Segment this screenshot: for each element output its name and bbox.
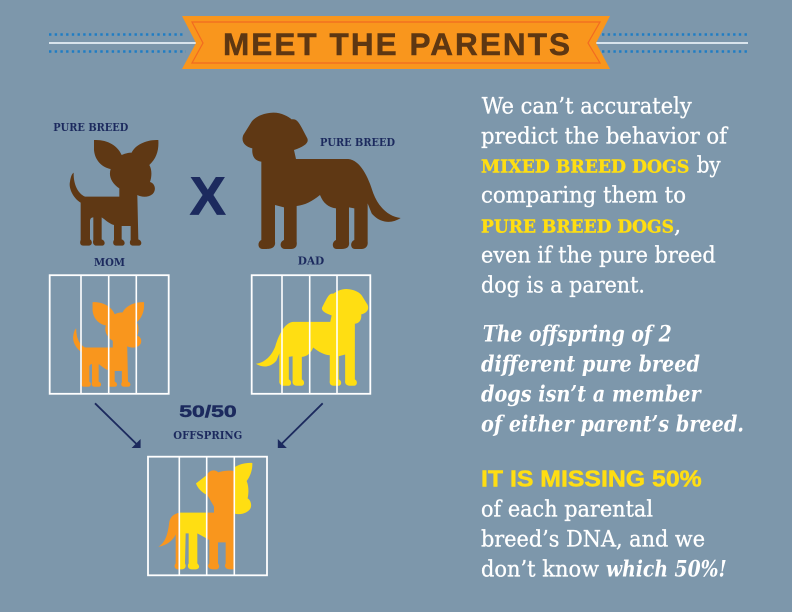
cage: offspring mixed dog — [148, 456, 267, 576]
text block: offspring statement: The offspring of 2 — [483, 322, 672, 348]
icon: yellow large dog — [256, 289, 368, 386]
text block: intro — [481, 93, 729, 298]
text block: missing dna: of each parental — [481, 497, 653, 523]
text block: missing dna: breed’s DNA, and we — [481, 527, 705, 553]
title: MEET THE PARENTS — [223, 26, 570, 62]
text block: missing dna — [481, 466, 727, 583]
label: 50/50: 50/50 — [179, 402, 237, 421]
text block: intro: MIXED BREED DOGS — [481, 158, 689, 178]
text block: offspring statement: different pure breed — [481, 352, 700, 378]
text block: offspring statement: dogs isn’t a member — [481, 382, 703, 408]
text block: intro: , — [674, 212, 681, 238]
arrow: dad to offspring — [278, 403, 323, 448]
text block: intro: predict the behavior of — [481, 123, 729, 149]
text block: offspring statement — [481, 322, 744, 438]
label: dad: DAD — [298, 254, 324, 268]
text block: missing dna: which 50%! — [606, 557, 727, 583]
icon: orange chihuahua — [73, 302, 144, 387]
mom parent group — [53, 120, 158, 269]
label: pure breed mom: PURE BREED — [53, 120, 128, 134]
label: pure breed dad: PURE BREED — [320, 135, 395, 149]
text block: intro: comparing them to — [481, 182, 686, 208]
cage: dad genes — [252, 275, 370, 394]
text block: intro: dog is a parent. — [481, 272, 645, 298]
dad parent group — [243, 113, 401, 268]
icon: brown large dog dad — [243, 113, 401, 249]
icon: offspring striped dog — [158, 463, 252, 569]
text block: intro: by — [697, 153, 721, 179]
multiply sign: X — [190, 167, 226, 227]
text block: intro: We can’t accurately — [482, 93, 692, 119]
banner ribbon — [182, 16, 610, 69]
label: mom: MOM — [94, 255, 125, 269]
text block: intro: PURE BREED DOGS — [481, 217, 674, 237]
text block: missing dna: don’t know — [481, 557, 599, 583]
label: offspring: OFFSPRING — [173, 428, 242, 442]
text block: offspring statement: of either parent’s breed. — [481, 412, 744, 438]
icon: brown chihuahua mom — [70, 140, 158, 246]
arrow: mom to offspring — [95, 403, 141, 448]
title banner — [182, 16, 610, 69]
text block: missing dna: IT IS MISSING 50% — [481, 466, 702, 492]
cage: mom genes — [50, 275, 169, 394]
text block: intro: even if the pure breed — [481, 243, 716, 269]
